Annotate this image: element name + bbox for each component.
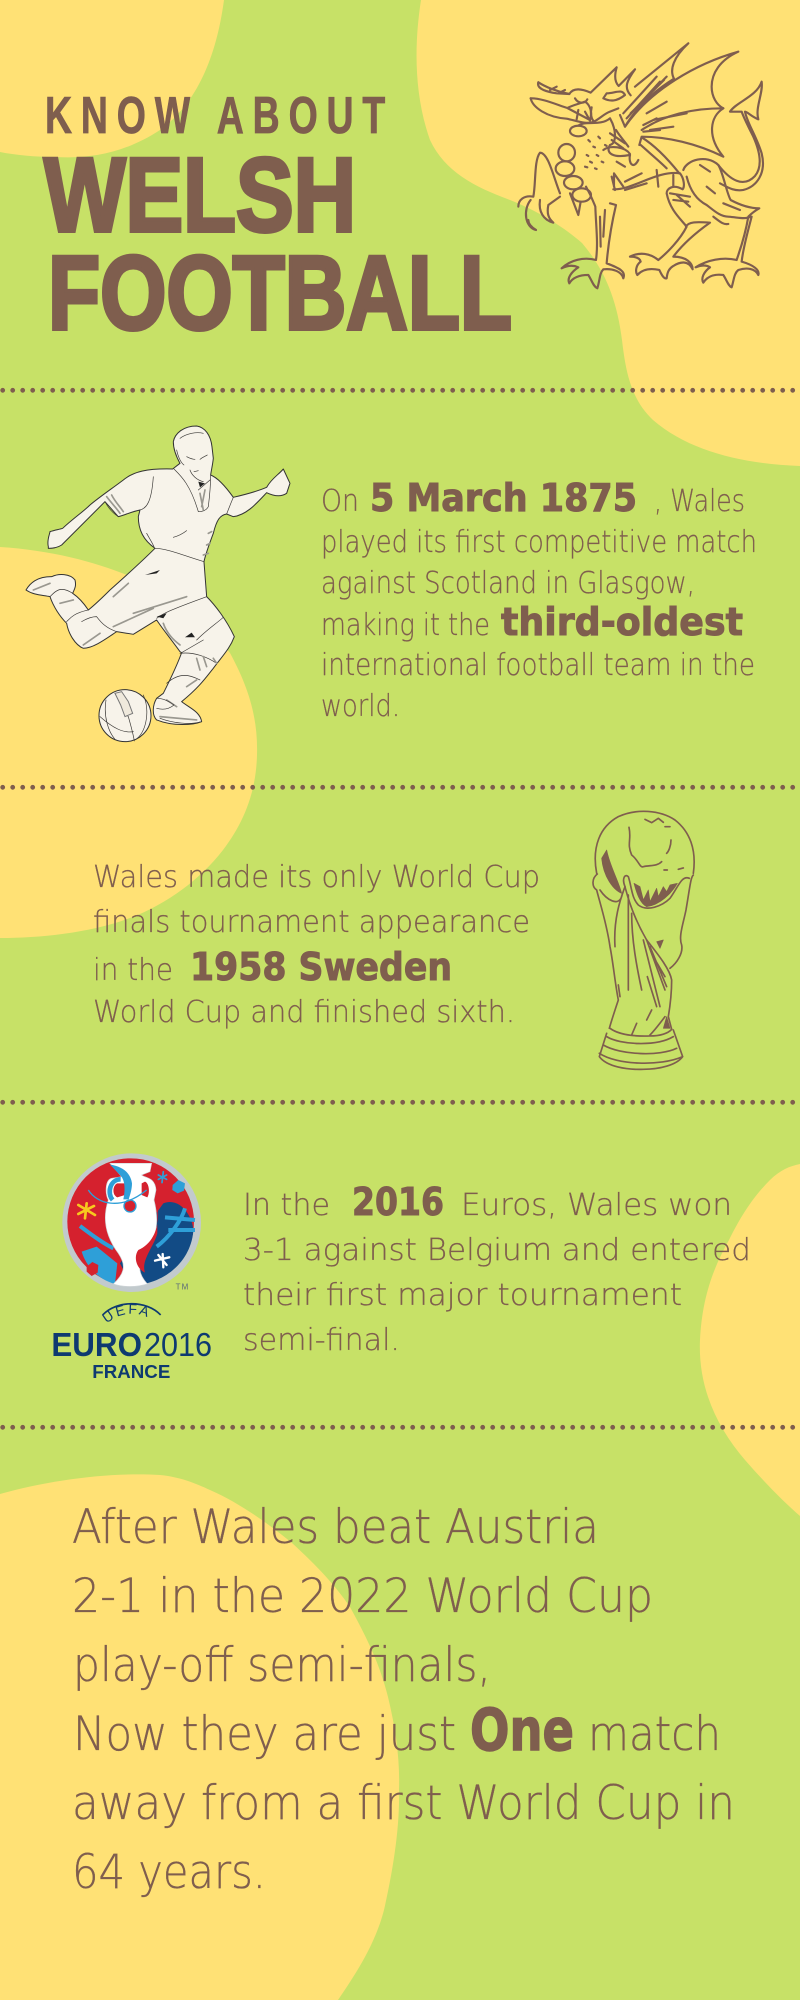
icon: uefa euro 2016 logo: UEFA bbox=[102, 1304, 148, 1322]
illustration: footballer kicking bbox=[26, 426, 290, 742]
text: euro 2016: their first major tournament bbox=[243, 1278, 682, 1313]
panel: header bbox=[44, 43, 763, 352]
text: euro 2016 bbox=[243, 1180, 751, 1358]
panel: first match bbox=[26, 426, 757, 742]
panel: closing text: One bbox=[470, 1696, 574, 1764]
panel: closing text: play-off semi-finals, bbox=[73, 1638, 491, 1693]
icon: uefa euro 2016 logo: 2016 bbox=[144, 1327, 212, 1364]
panel: closing text: away from a first World Cup in bbox=[72, 1776, 735, 1831]
icon: uefa euro 2016 logo: EURO bbox=[51, 1327, 142, 1364]
text: first match: On bbox=[321, 484, 359, 519]
blob: top left bbox=[0, 0, 224, 157]
text: world cup 1958: Wales made its only World Cup bbox=[93, 860, 540, 895]
title: football: FOOTBALL bbox=[48, 235, 512, 352]
text: first match: 5 March 1875 bbox=[370, 476, 637, 520]
text: world cup 1958: in the bbox=[93, 953, 173, 988]
text: first match: world. bbox=[321, 689, 400, 724]
text: euro 2016: In the bbox=[243, 1188, 330, 1223]
text: euro 2016: 3-1 against Belgium and entered bbox=[243, 1233, 751, 1268]
blob: top right bbox=[417, 0, 800, 466]
text: first match: against Scotland in Glasgow, bbox=[321, 566, 695, 601]
blob: left middle bbox=[0, 547, 257, 938]
text: euro 2016: 2016 bbox=[352, 1180, 444, 1224]
panel: closing text: Now they are just bbox=[73, 1707, 456, 1762]
icon: welsh dragon bbox=[518, 43, 763, 288]
panel: closing text: match bbox=[588, 1707, 721, 1762]
icon: ball bbox=[99, 690, 151, 742]
panel: closing text: 64 years. bbox=[72, 1845, 266, 1900]
text: first match bbox=[321, 476, 757, 724]
heading: know about: KNOW ABOUT bbox=[45, 86, 394, 144]
text: euro 2016: Euros, Wales won bbox=[461, 1188, 732, 1223]
text: first match: , Wales bbox=[654, 484, 745, 519]
title: welsh: WELSH bbox=[44, 137, 356, 254]
panel: closing text bbox=[72, 1500, 735, 1900]
panel: closing text: After Wales beat Austria bbox=[72, 1500, 599, 1555]
panel: closing text: 2-1 in the 2022 World Cup bbox=[72, 1569, 653, 1624]
text: world cup 1958: World Cup and finished sixth. bbox=[93, 995, 515, 1030]
blob: right middle bbox=[700, 1164, 800, 1516]
blob: bottom left bbox=[0, 1474, 399, 2000]
text: world cup 1958: 1958 Sweden bbox=[190, 945, 452, 989]
text: first match: third-oldest bbox=[501, 600, 743, 644]
panel: euro 2016 bbox=[51, 1153, 751, 1382]
icon: uefa euro 2016 logo: FRANCE bbox=[92, 1361, 170, 1382]
icon: world cup trophy bbox=[593, 811, 694, 1069]
text: first match: making it the bbox=[321, 608, 490, 643]
icon: uefa euro 2016 logo: TM bbox=[176, 1282, 188, 1291]
text: world cup 1958: finals tournament appearance bbox=[93, 905, 530, 940]
text: world cup 1958 bbox=[93, 860, 540, 1030]
icon: uefa euro 2016 logo bbox=[51, 1153, 212, 1382]
panel: world cup 1958 bbox=[93, 811, 694, 1069]
text: euro 2016: semi-final. bbox=[243, 1323, 400, 1358]
